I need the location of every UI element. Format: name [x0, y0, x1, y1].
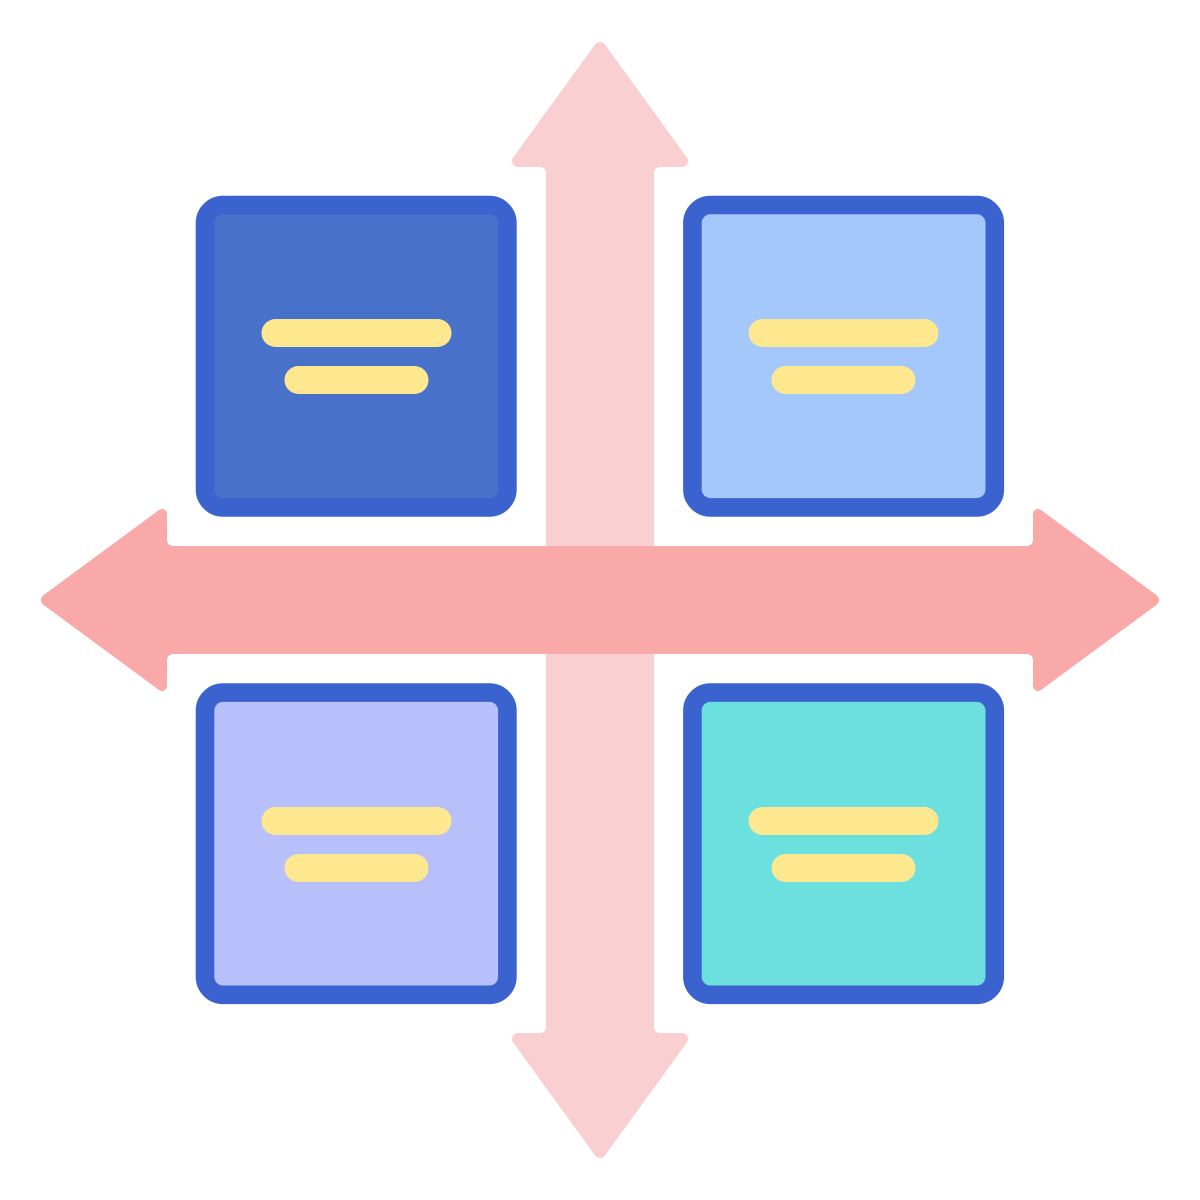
panel: bottom-right quadrant	[692, 693, 995, 995]
panel: bottom-left quadrant	[205, 693, 507, 995]
top-left text placeholder lines	[262, 319, 452, 394]
panel: top-right quadrant	[692, 205, 995, 507]
top-right text placeholder lines	[748, 319, 938, 394]
bottom-left text placeholder lines	[262, 807, 452, 882]
bottom-right text placeholder lines	[748, 807, 938, 882]
arrow: horizontal double-headed	[41, 509, 1159, 691]
arrow: vertical double-headed	[512, 42, 688, 1158]
panel: top-left quadrant	[205, 205, 507, 507]
